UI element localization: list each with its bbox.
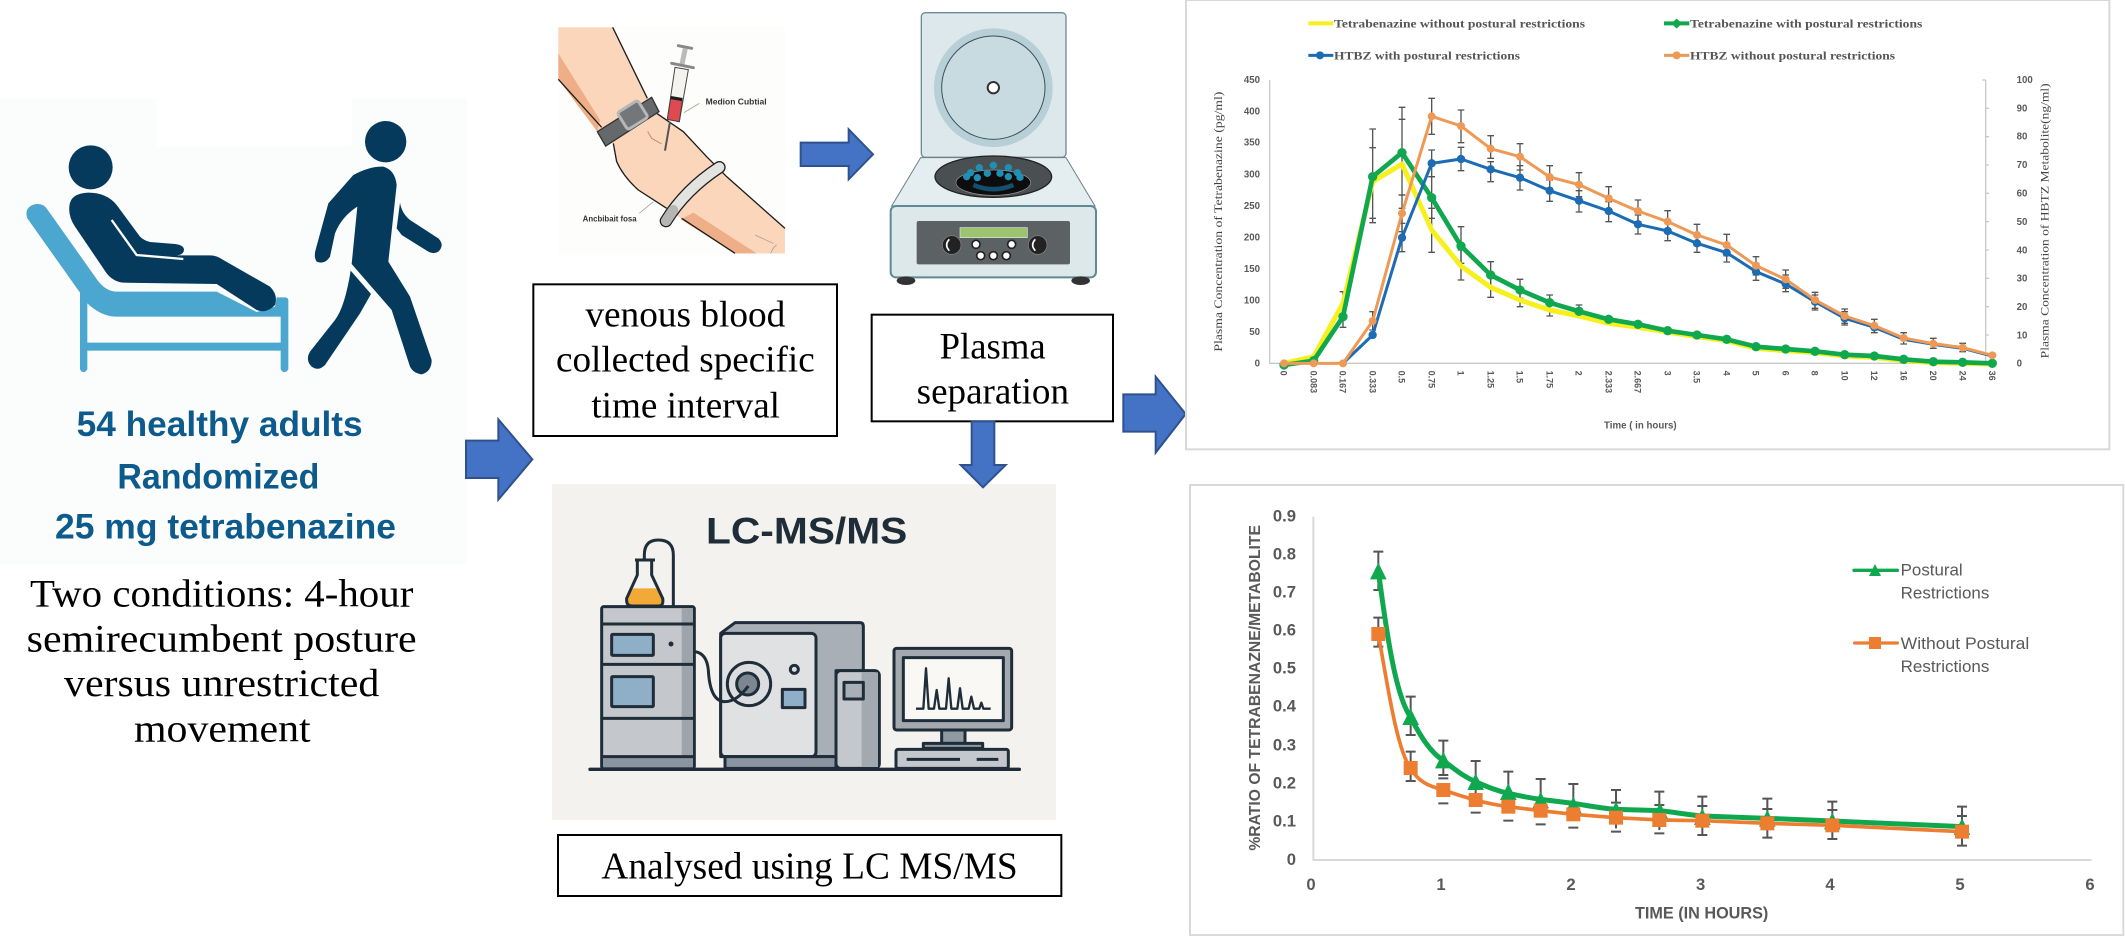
x-axis time labels: 5	[1751, 371, 1761, 376]
x-axis time labels: 3.5	[1692, 371, 1702, 383]
x-axis labels: 2	[1566, 875, 1576, 894]
axes	[1244, 75, 2033, 393]
axis title: left concentration: Plasma Concentration of Tetrabenazine (pg/ml)	[1211, 92, 1225, 352]
x-axis time labels: 0.083	[1308, 371, 1318, 393]
left y-axis labels: 50	[1249, 327, 1260, 338]
x-axis time labels: 10	[1839, 371, 1849, 381]
chart: plasma concentration versus time	[1186, 0, 2109, 449]
label: median cubital: Medion Cubtial	[706, 97, 767, 107]
text box: plasma separation: separation	[917, 371, 1069, 412]
axis title: ratio: %RATIO OF TETRABENAZNE/METABOLITE	[1247, 525, 1264, 851]
icon: mass spectrometer	[695, 623, 879, 768]
axis title: time: Time ( in hours)	[1604, 420, 1677, 431]
text box: plasma separation: Plasma	[940, 326, 1046, 367]
text box: venous blood collected: collected specific	[556, 340, 815, 381]
left y-axis labels: 350	[1244, 138, 1260, 149]
illustration: LC-MS/MS instrument	[552, 484, 1056, 820]
x-axis time labels: 0.167	[1338, 371, 1348, 393]
y-axis labels: 0.1	[1273, 812, 1296, 831]
left y-axis labels: 450	[1244, 75, 1260, 86]
arrow: plasma separation to LC-MS/MS	[961, 421, 1006, 487]
series: tetrabenazine without postural restrictions	[1284, 164, 1992, 364]
heading: study summary: Randomized	[117, 457, 319, 496]
x-axis time labels: 2	[1574, 371, 1584, 376]
y-axis labels: 0.5	[1273, 658, 1296, 677]
right y-axis labels: 30	[2017, 274, 2027, 285]
y-axis labels: 0.7	[1273, 582, 1296, 601]
icon: walking person	[308, 121, 442, 374]
x-axis time labels: 4	[1721, 371, 1731, 376]
chart: ratio of tetrabenazine to metabolite	[1190, 485, 2123, 935]
left y-axis labels: 300	[1244, 169, 1260, 180]
legend: pharmacokinetic series: HTBZ without postural restrictions	[1690, 48, 1895, 62]
x-axis time labels: 0.75	[1426, 371, 1436, 388]
x-axis time labels: 8	[1810, 371, 1820, 376]
icon: syringe	[665, 46, 693, 151]
label: antecubital fossa: Ancbibait fosa	[583, 213, 637, 223]
series: HTBZ without postural restrictions	[1284, 116, 1992, 363]
text box: plasma separation	[872, 315, 1113, 421]
right y-axis labels: 40	[2017, 245, 2027, 256]
x-axis labels	[1306, 875, 2095, 894]
right y-axis labels: 80	[2017, 132, 2027, 143]
left y-axis labels	[1244, 75, 1260, 370]
axis title: time in hours: TIME (IN HOURS)	[1635, 903, 1768, 922]
right y-axis labels: 90	[2017, 103, 2027, 114]
arrow: participants to blood draw	[466, 419, 532, 500]
x-axis time labels: 12	[1869, 371, 1879, 381]
series: tetrabenazine with postural restrictions	[1284, 153, 1992, 365]
series: HTBZ with postural restrictions	[1343, 159, 1992, 363]
legend: pharmacokinetic series: Tetrabenazine with postural restrictions	[1690, 17, 1923, 31]
y-axis labels	[1273, 507, 1297, 869]
heading: LC-MS/MS: LC-MS/MS	[706, 510, 907, 551]
x-axis time labels: 20	[1928, 371, 1938, 381]
left y-axis labels: 400	[1244, 106, 1260, 117]
heading: study summary: 54 healthy adults	[77, 405, 363, 444]
x-axis time labels: 1	[1456, 371, 1466, 376]
legend: without postural restrictions: Restrictions	[1901, 657, 1989, 676]
x-axis labels: 4	[1825, 875, 1835, 894]
y-axis labels: 0.3	[1273, 736, 1296, 755]
series: postural restrictions	[1370, 563, 1970, 835]
series: without postural restrictions	[1371, 627, 1969, 839]
heading: study summary	[55, 405, 396, 546]
illustration: centrifuge	[891, 13, 1096, 285]
legend: postural restrictions: Postural	[1901, 561, 1963, 580]
icon: white wrist band	[666, 167, 719, 221]
legend: pharmacokinetic series	[1308, 17, 1923, 62]
y-axis labels: 0.4	[1273, 697, 1297, 716]
legend: without postural restrictions	[1855, 634, 2029, 676]
legend: postural restrictions	[1854, 561, 1989, 603]
x-axis time labels	[1279, 371, 1997, 393]
right y-axis labels: 20	[2017, 302, 2027, 313]
right y-axis labels	[2017, 75, 2033, 370]
left y-axis labels: 150	[1244, 264, 1260, 275]
x-axis time labels: 1.5	[1515, 371, 1525, 383]
left y-axis labels: 200	[1244, 232, 1260, 243]
y-axis labels: 0.6	[1273, 621, 1296, 640]
text block: two conditions: Two conditions: 4-hour	[30, 572, 413, 616]
text box: venous blood collected	[533, 284, 837, 436]
error bars	[1373, 552, 1967, 846]
x-axis labels: 5	[1955, 875, 1965, 894]
heading: study summary: 25 mg tetrabenazine	[55, 507, 396, 546]
right y-axis labels: 70	[2017, 160, 2027, 171]
panel: study participants	[0, 97, 467, 564]
arrow: blood draw to centrifuge	[801, 129, 873, 179]
error bars	[1340, 98, 1966, 352]
legend: pharmacokinetic series: Tetrabenazine without postural restrictions	[1334, 17, 1585, 31]
icon: buckled strap	[597, 97, 659, 146]
x-axis time labels: 0.333	[1367, 371, 1377, 393]
x-axis labels: 6	[2085, 875, 2095, 894]
text box: venous blood collected: venous blood	[585, 295, 786, 336]
text block: two conditions: semirecumbent posture	[27, 616, 417, 660]
x-axis labels: 0	[1306, 875, 1316, 894]
x-axis time labels: 24	[1957, 371, 1967, 381]
legend: without postural restrictions: Without Postural	[1901, 634, 2029, 653]
x-axis time labels: 0	[1279, 371, 1289, 376]
x-axis time labels: 2.333	[1603, 371, 1613, 393]
x-axis time labels: 0.5	[1397, 371, 1407, 383]
x-axis time labels: 16	[1898, 371, 1908, 381]
text block: two conditions	[27, 572, 417, 750]
y-axis labels: 0	[1287, 850, 1296, 869]
left y-axis labels: 100	[1244, 296, 1260, 307]
text box: venous blood collected: time interval	[591, 385, 780, 426]
text box: analysed using LC MS/MS: Analysed using LC MS/MS	[601, 845, 1018, 887]
icon: computer with chromatogram	[894, 648, 1012, 768]
legend: postural restrictions: Restrictions	[1901, 584, 1989, 603]
left y-axis labels: 0	[1255, 359, 1260, 370]
icon: reclining person on chair	[26, 145, 288, 372]
x-axis labels: 1	[1436, 875, 1446, 894]
right y-axis labels: 10	[2017, 330, 2027, 341]
arrow: plasma separation to chart	[1123, 377, 1186, 453]
x-axis time labels: 6	[1780, 371, 1790, 376]
x-axis time labels: 2.667	[1633, 371, 1643, 393]
x-axis labels: 3	[1696, 875, 1705, 894]
y-axis labels: 0.8	[1273, 544, 1296, 563]
text box: analysed using LC MS/MS	[558, 835, 1061, 896]
y-axis labels: 0.9	[1273, 507, 1296, 526]
text block: two conditions: versus unrestricted	[64, 661, 380, 705]
x-axis time labels: 1.25	[1485, 371, 1495, 388]
x-axis time labels: 36	[1987, 371, 1997, 381]
x-axis time labels: 3	[1662, 371, 1672, 376]
icon: flask on LC stack	[602, 540, 694, 768]
right y-axis labels: 0	[2017, 359, 2022, 370]
right y-axis labels: 50	[2017, 217, 2027, 228]
right y-axis labels: 60	[2017, 188, 2027, 199]
legend: pharmacokinetic series: HTBZ with postural restrictions	[1334, 48, 1520, 62]
x-axis time labels: 1.75	[1544, 371, 1554, 388]
axis title: right concentration: Plasma Concentration of HBTZ Metabolite(ng/ml)	[2037, 83, 2051, 358]
y-axis labels: 0.2	[1273, 773, 1296, 792]
illustration: venous blood draw from arm	[558, 27, 785, 255]
left y-axis labels: 250	[1244, 201, 1260, 212]
text block: two conditions: movement	[134, 706, 311, 750]
right y-axis labels: 100	[2017, 75, 2033, 86]
